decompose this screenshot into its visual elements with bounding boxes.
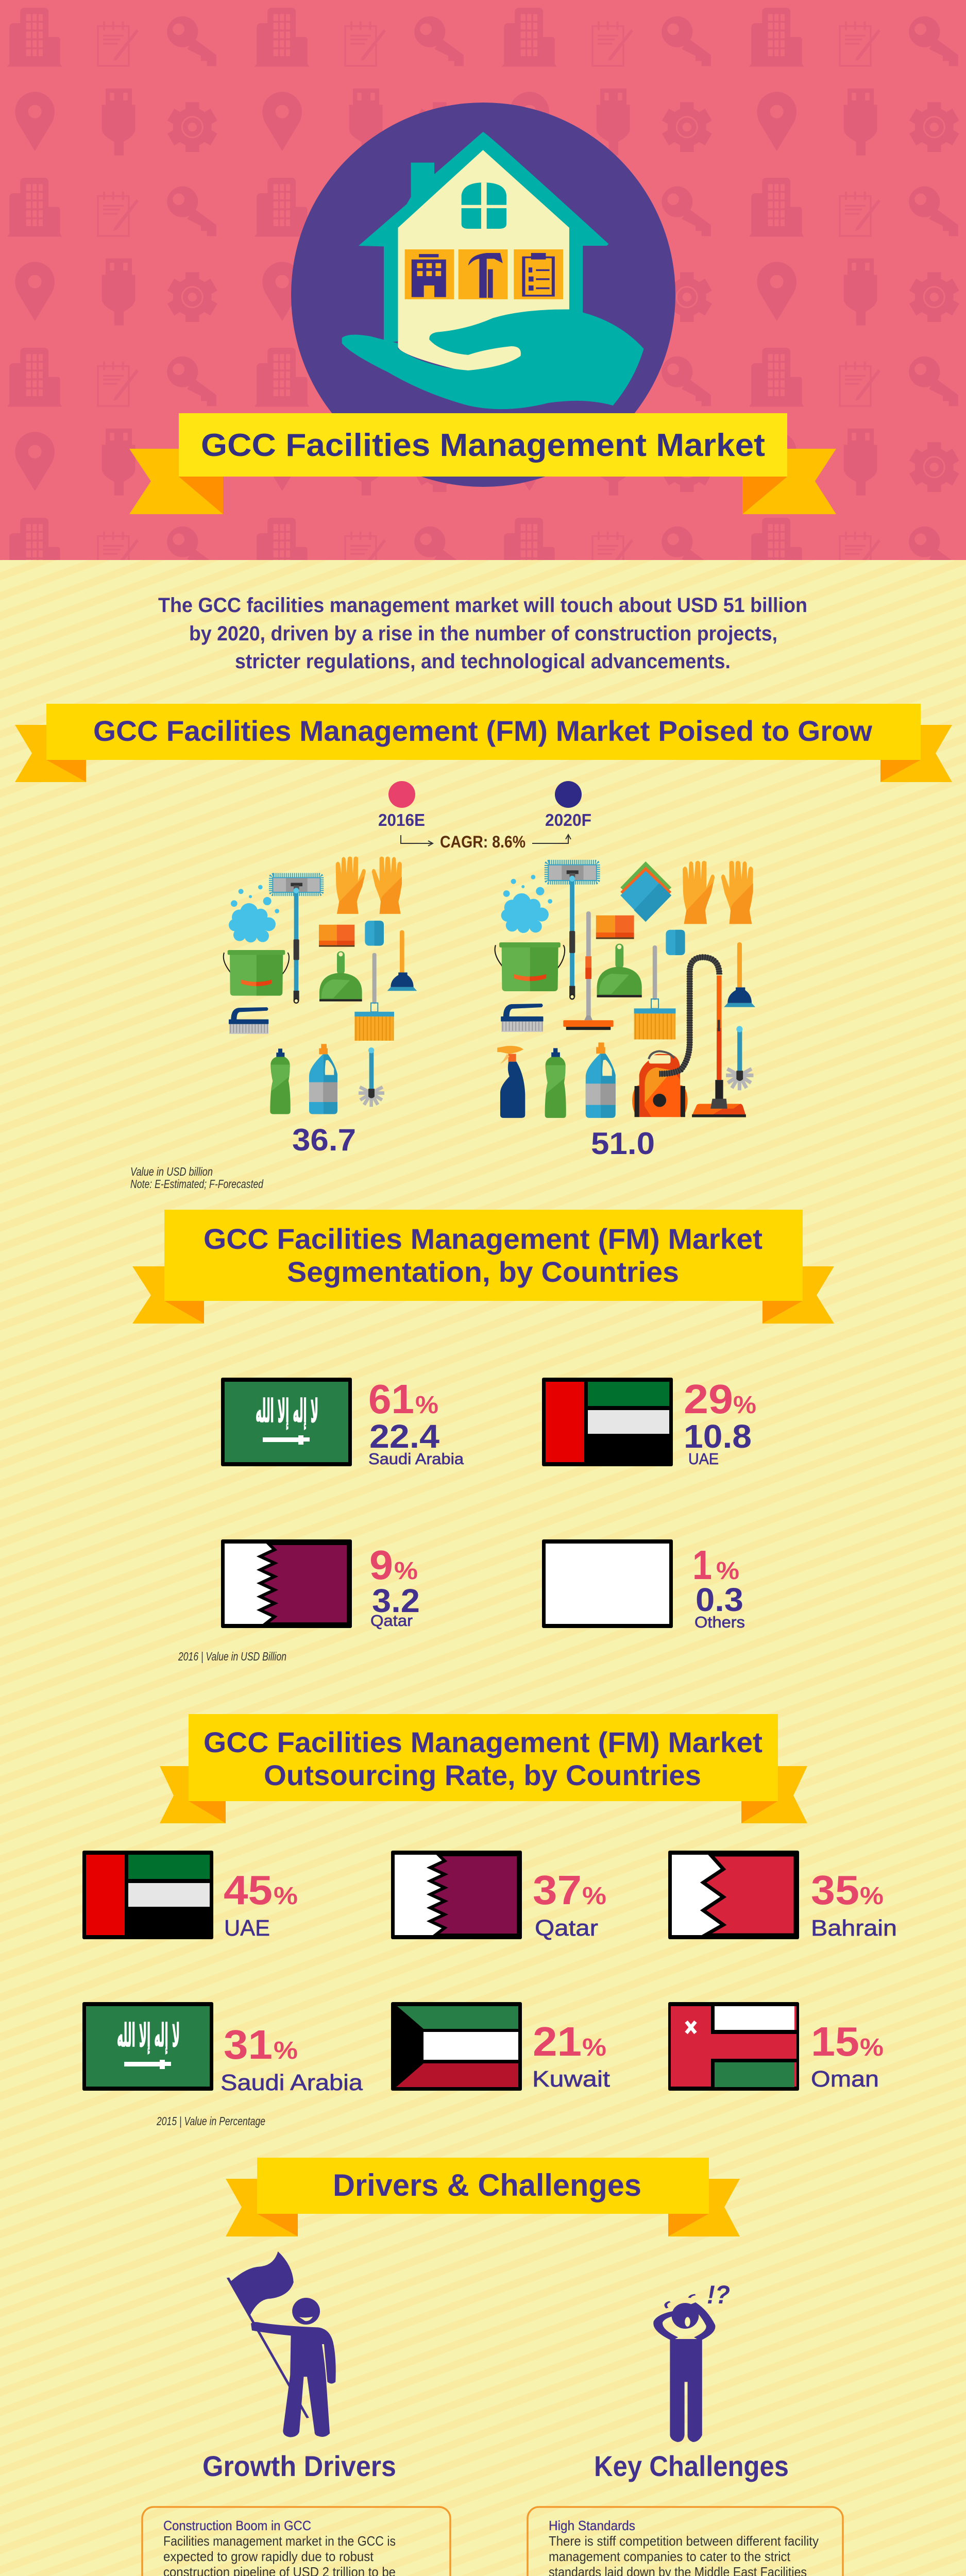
stat: UAE: % [733,1392,756,1419]
panel: growth drivers [142,2507,450,2576]
stat: Bahrain outsourcing: % [860,1883,884,1910]
section ribbon: drivers and challenges: Drivers & Challenges [333,2168,641,2202]
icons: 2016 cleaning tools [224,857,417,1114]
value 2016: 36.7 [292,1123,356,1157]
stat: Others: % [716,1557,739,1585]
notes: Note: E-Estimated; F-Forecasted [130,1177,264,1191]
stat: Qatar outsourcing: % [582,1883,606,1910]
heading: key challenges: Key Challenges [594,2450,789,2482]
icon: worried person: !? [707,2280,730,2309]
stat: Qatar: 9 [369,1542,393,1588]
panel: key challenges [528,2507,843,2576]
stat: Saudi Arabia: 61 [368,1376,414,1422]
stat: Bahrain outsourcing: 35 [811,1867,859,1913]
section ribbon: outsourcing rate: GCC Facilities Management (FM) Market [204,1726,762,1758]
stat: Kuwait outsourcing: Kuwait [532,2066,610,2092]
heading: growth drivers: Growth Drivers [202,2450,396,2482]
intro paragraph [158,594,807,673]
stat: Qatar: 3.2 [372,1582,420,1619]
flag: Bahrain [668,1851,799,1939]
stat: Oman outsourcing: Oman [811,2066,879,2092]
stat: UAE: 10.8 [684,1418,752,1455]
section ribbon: drivers and challenges [226,2158,740,2236]
flag: UAE [542,1378,673,1466]
stat: Others: Others [694,1613,745,1631]
house and hand [342,132,644,409]
section ribbon: market poised to grow: GCC Facilities Management (FM) Market Poised to Grow [93,715,872,747]
stat: Oman outsourcing: 15 [811,2019,859,2064]
flag: Saudi Arabia: لا إله إلا الله [256,1392,318,1430]
intro paragraph: by 2020, driven by a rise in the number of construction projects, [189,622,777,645]
stat: Qatar: Qatar [370,1612,413,1630]
flag: Others [542,1539,673,1628]
stat: Others [692,1542,745,1631]
flag: Oman [668,2002,799,2091]
driver: construction boom: Facilities management market in the GCC is [163,2533,396,2549]
value 2020: 51.0 [591,1126,655,1161]
driver: construction boom: Construction Boom in GCC [163,2518,311,2533]
stat: UAE outsourcing [224,1867,298,1941]
notes: Value in USD billion [130,1165,213,1178]
stat: Saudi Arabia outsourcing [221,2022,363,2095]
section ribbon: segmentation by countries: GCC Facilities Management (FM) Market [204,1223,762,1255]
stat: Kuwait outsourcing: 21 [533,2019,582,2064]
stat: Oman outsourcing [811,2019,884,2092]
section ribbon: outsourcing rate [160,1714,807,1823]
driver: construction boom [163,2518,396,2576]
flag: UAE [82,1851,213,1939]
challenge: high standards: management companies to cater to the strict [549,2549,791,2564]
stat: Qatar: % [394,1557,418,1585]
section ribbon: market poised to grow [15,704,952,782]
stat: Saudi Arabia outsourcing: 31 [224,2022,273,2067]
icon: worried person [658,2280,730,2442]
stat: Kuwait outsourcing [532,2019,610,2092]
stat: Others: 0.3 [696,1581,743,1618]
legend: 2020F [545,781,591,829]
header background with icon pattern [0,0,966,560]
CAGR label with arrows: CAGR: 8.6% [440,833,526,851]
legend: 2016E [378,781,425,829]
stat: Saudi Arabia [368,1376,464,1468]
stat: UAE outsourcing: % [274,1883,298,1910]
note: outsourcing: 2015 | Value in Percentage [156,2114,265,2128]
stat: Bahrain outsourcing [811,1867,897,1941]
intro paragraph: The GCC facilities management market will touch about USD 51 billion [158,594,807,617]
flag: Qatar [391,1851,522,1939]
icons: 2020 cleaning tools [495,861,755,1118]
purple circle [291,103,675,487]
stat: Qatar outsourcing: 37 [533,1867,582,1913]
CAGR label with arrows [401,833,571,851]
icon: person holding flag [228,2251,336,2437]
stat: Oman outsourcing: % [860,2034,884,2061]
legend: 2020F: 2020F [545,810,591,829]
stat: Kuwait outsourcing: % [582,2034,606,2061]
flag: Saudi Arabia [221,1378,352,1466]
challenge: high standards [549,2518,819,2576]
section ribbon: segmentation by countries: Segmentation, by Countries [287,1256,679,1288]
flag: Saudi Arabia [82,2002,213,2091]
legend: 2016E: 2016E [378,810,425,829]
stat: UAE outsourcing: 45 [224,1867,273,1913]
stat: Saudi Arabia outsourcing: % [274,2037,298,2064]
stat: Saudi Arabia: Saudi Arabia [368,1450,464,1468]
main title: GCC Facilities Management Market [201,428,765,463]
hero illustration: house held in hand [291,103,675,487]
stat: Saudi Arabia outsourcing: Saudi Arabia [221,2070,363,2095]
flag: Kuwait [391,2002,522,2091]
stat: Qatar [369,1542,420,1630]
intro paragraph: stricter regulations, and technological advancements. [235,650,731,673]
section ribbon: outsourcing rate: Outsourcing Rate, by Countries [264,1759,701,1791]
stat: Saudi Arabia: % [415,1392,438,1419]
note: segmentation: 2016 | Value in USD Billion [178,1650,286,1663]
main title ribbon [129,413,836,514]
stat: Qatar outsourcing: Qatar [535,1916,598,1941]
stat: Others: 1 [692,1542,712,1588]
stat: UAE: UAE [688,1450,719,1468]
stat: Saudi Arabia: 22.4 [369,1418,439,1455]
stat: Qatar outsourcing [533,1867,606,1941]
challenge: high standards: High Standards [549,2518,635,2533]
stat: UAE [684,1376,756,1468]
driver: construction boom: expected to grow rapidly due to robust [163,2549,374,2564]
stat: UAE outsourcing: UAE [224,1916,270,1941]
stat: UAE: 29 [684,1376,733,1422]
flag: Qatar [221,1539,352,1628]
challenge: high standards: There is stiff competition between different facility [549,2533,819,2549]
yellow striped page background [0,560,966,2576]
section ribbon: segmentation by countries [132,1210,834,1324]
stat: Bahrain outsourcing: Bahrain [811,1916,897,1941]
flag: Saudi Arabia: لا إله إلا الله [117,2016,180,2054]
notes [130,1165,264,1191]
